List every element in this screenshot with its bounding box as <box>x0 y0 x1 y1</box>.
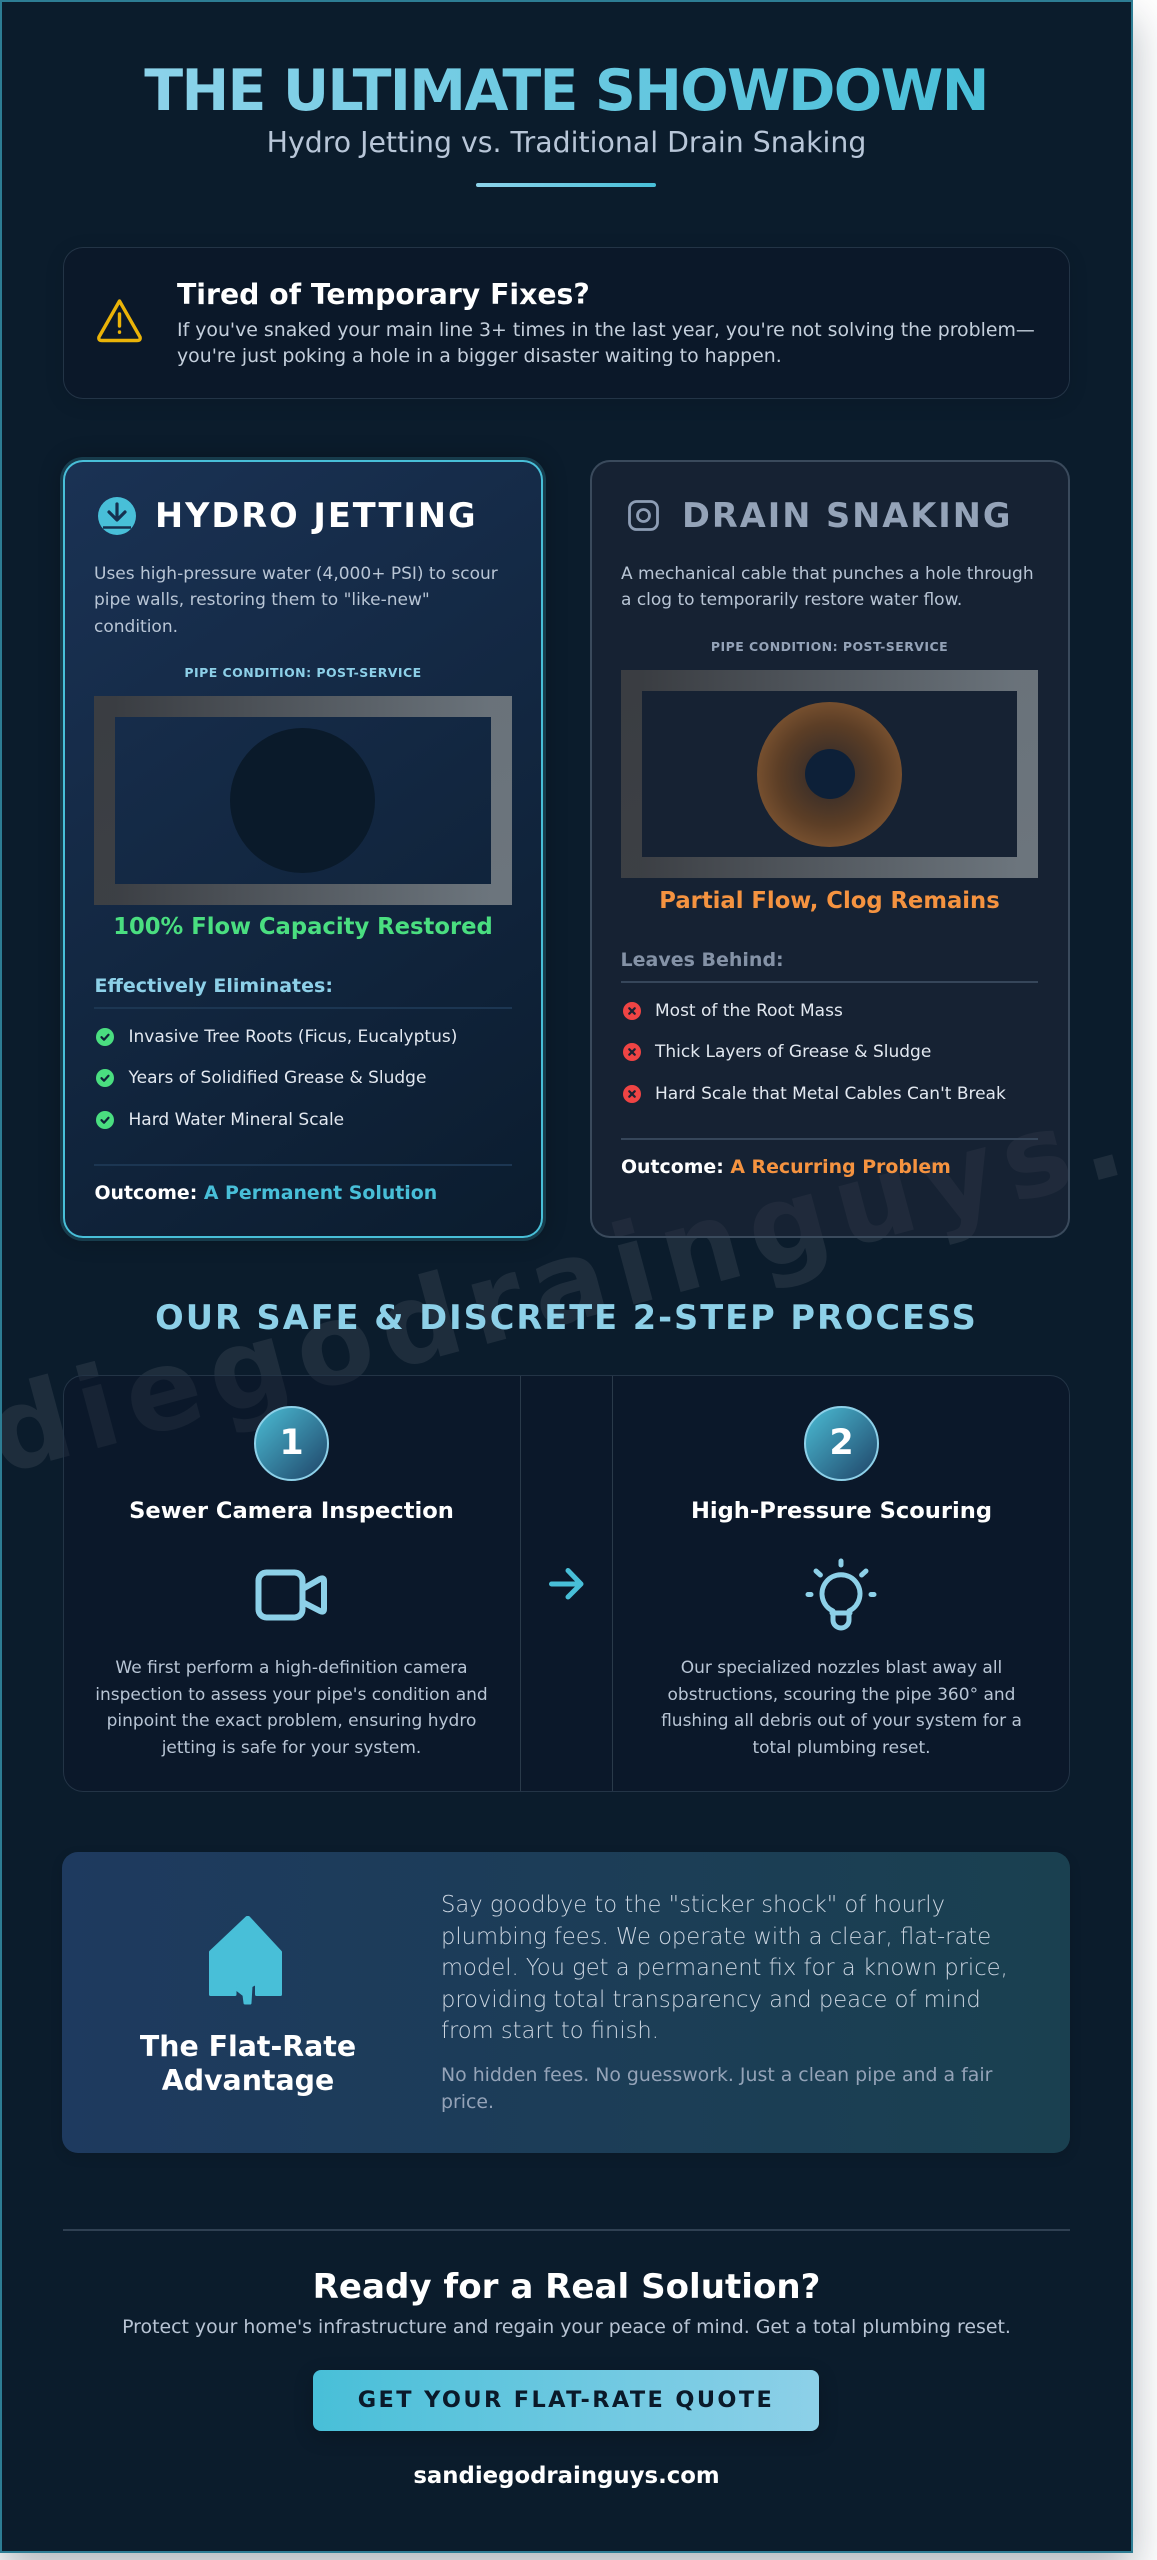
section heading: process: OUR SAFE & DISCRETE 2-STEP PROCESS <box>155 1298 978 1337</box>
list item: root mass: Most of the Root Mass <box>655 1001 843 1021</box>
step 2 text: flushing all debris out of your system for a <box>661 1711 1022 1731</box>
title: THE ULTIMATE SHOWDOWN <box>144 58 988 124</box>
result: flow restored: 100% Flow Capacity Restored <box>113 914 493 940</box>
flat-rate heading: Advantage <box>162 2064 334 2097</box>
cta button: GET YOUR FLAT-RATE QUOTE <box>358 2387 774 2413</box>
pipe label: PIPE CONDITION: POST-SERVICE <box>184 665 422 680</box>
step 1 title: Sewer Camera Inspection <box>129 1498 454 1524</box>
alert heading: Tired of Temporary Fixes? <box>177 278 590 311</box>
step divider right <box>612 1376 613 1791</box>
step 1 text: jetting is safe for your system. <box>162 1738 421 1758</box>
alert text <box>177 319 1035 367</box>
list divider <box>94 1007 512 1009</box>
panel: call to action <box>63 2229 1070 2489</box>
description <box>621 564 1034 610</box>
step 1 text: We first perform a high-definition camera <box>115 1658 468 1678</box>
cta heading: Ready for a Real Solution? <box>313 2267 820 2307</box>
flat-rate note: No hidden fees. No guesswork. Just a clean pipe and a fair <box>441 2064 992 2086</box>
flat-rate text: from start to finish. <box>441 2018 659 2044</box>
clean pipe opening <box>230 728 375 872</box>
description: a clog to temporarily restore water flow. <box>621 590 962 610</box>
flat-rate text: providing total transparency and peace of mind <box>441 1987 981 2013</box>
icon: hydro jet <box>98 497 136 535</box>
step number 2: 2 <box>829 1423 854 1463</box>
step 2 <box>661 1406 1022 1758</box>
panel: temporary fixes alert <box>63 247 1070 399</box>
footer divider <box>63 2229 1070 2231</box>
pipe diagram: clean <box>94 696 512 905</box>
step 2 text: total plumbing reset. <box>752 1738 931 1758</box>
panel: drain snaking <box>590 460 1070 1238</box>
step 1 text: pinpoint the exact problem, ensuring hydro <box>107 1711 476 1731</box>
flat-rate heading <box>140 2030 356 2097</box>
outcome divider <box>94 1164 512 1166</box>
website: sandiegodrainguys.com <box>413 2463 720 2489</box>
result: partial flow: Partial Flow, Clog Remains <box>659 888 1000 914</box>
flat-rate text: plumbing fees. We operate with a clear, flat-rate <box>441 1924 991 1950</box>
remaining opening <box>804 749 854 799</box>
panel: process <box>63 1375 1070 1792</box>
step 1 text: inspection to assess your pipe's condition and <box>95 1684 488 1704</box>
panel: hydro jetting <box>63 460 543 1238</box>
arrow <box>549 1568 584 1600</box>
title divider <box>476 183 656 187</box>
list item: hard scale: Hard Scale that Metal Cables Can't Break <box>655 1084 1006 1104</box>
step 2 text <box>661 1658 1022 1758</box>
flat-rate text <box>441 1892 1008 2044</box>
outcome: Outcome: A Recurring Problem <box>621 1156 951 1178</box>
flat-rate text: model. You get a permanent fix for a known price, <box>441 1955 1008 1981</box>
alert text: If you've snaked your main line 3+ times in the last year, you're not solving the problem— <box>177 319 1035 341</box>
cta text: Protect your home's infrastructure and regain your peace of mind. Get a total plumbing reset. <box>122 2316 1011 2338</box>
description <box>94 564 498 637</box>
flat-rate note: price. <box>441 2090 494 2112</box>
flat-rate note <box>441 2064 992 2112</box>
list heading: Leaves Behind: <box>620 949 784 971</box>
alert text: you're just poking a hole in a bigger disaster waiting to happen. <box>177 345 782 367</box>
icon: house <box>209 1916 282 2004</box>
list heading: Effectively Eliminates: <box>94 975 333 997</box>
icon: light bulb <box>806 1558 876 1630</box>
clog ring <box>757 702 902 846</box>
list item: grease: Years of Solidified Grease & Sludge <box>128 1068 426 1088</box>
outcome: Outcome: A Permanent Solution <box>94 1182 437 1204</box>
description: A mechanical cable that punches a hole through <box>621 564 1034 584</box>
step 1 text <box>95 1658 488 1758</box>
panel: flat-rate advantage <box>62 1852 1070 2153</box>
list item: tree roots: Invasive Tree Roots (Ficus, Eucalyptus) <box>128 1026 457 1046</box>
cta button <box>313 2370 819 2431</box>
flat-rate heading: The Flat-Rate <box>140 2030 356 2063</box>
list item: mineral scale: Hard Water Mineral Scale <box>128 1110 344 1130</box>
step divider left <box>520 1376 521 1791</box>
icon: video camera <box>256 1570 327 1620</box>
description: condition. <box>94 617 178 637</box>
outcome divider <box>621 1138 1038 1140</box>
step number 1: 1 <box>279 1423 304 1463</box>
flat-rate text: Say goodbye to the "sticker shock" of hourly <box>441 1892 945 1918</box>
step number 2 <box>804 1406 879 1481</box>
list item: grease layers: Thick Layers of Grease & Sludge <box>655 1042 931 1062</box>
icon: warning triangle <box>97 299 142 342</box>
description: Uses high-pressure water (4,000+ PSI) to scour <box>94 564 498 584</box>
step 1 <box>95 1406 488 1758</box>
heading: hydro jetting: HYDRO JETTING <box>155 496 478 534</box>
description: pipe walls, restoring them to "like-new" <box>94 590 430 610</box>
pipe diagram: clogged <box>621 670 1038 878</box>
subtitle: Hydro Jetting vs. Traditional Drain Snaking <box>267 126 866 159</box>
icon: drain snake <box>628 500 659 531</box>
list divider <box>621 981 1038 983</box>
step 2 text: Our specialized nozzles blast away all <box>681 1658 1002 1678</box>
step number 1 <box>254 1406 329 1481</box>
step 2 title: High-Pressure Scouring <box>691 1498 992 1524</box>
step 2 text: obstructions, scouring the pipe 360° and <box>668 1684 1015 1704</box>
pipe label: PIPE CONDITION: POST-SERVICE <box>711 639 948 654</box>
heading: drain snaking: DRAIN SNAKING <box>682 496 1012 534</box>
